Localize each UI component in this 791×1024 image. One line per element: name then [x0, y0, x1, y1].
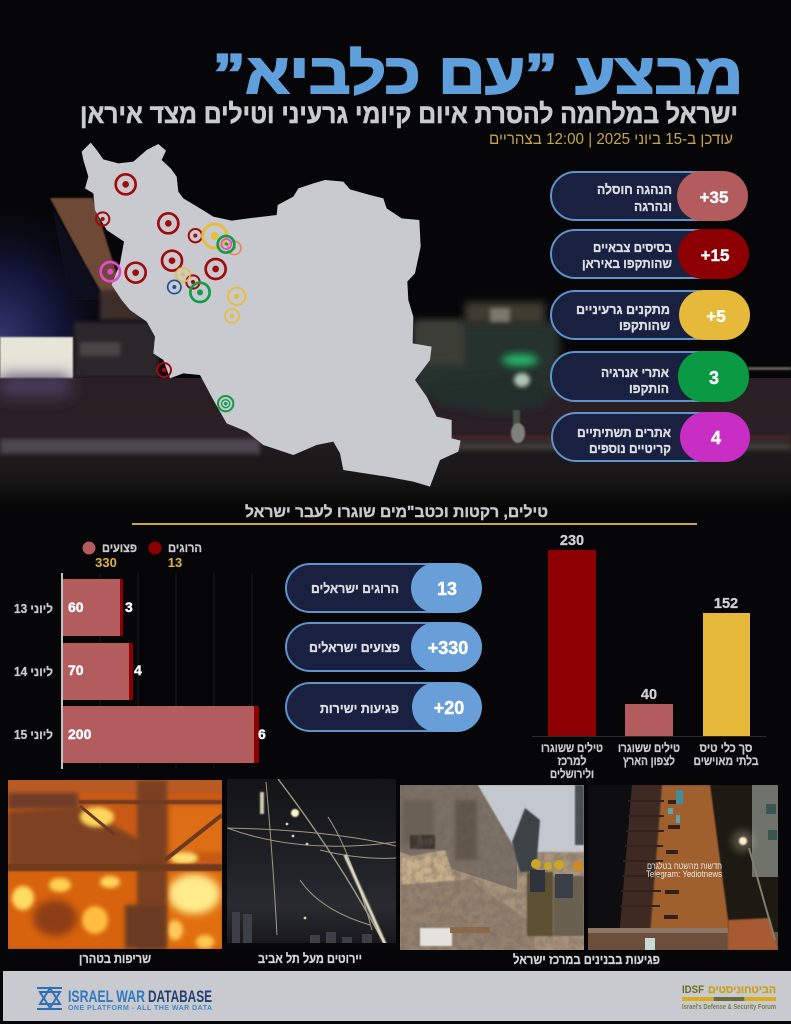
- logo: Israel War Database: ONE PLATFORM - ALL THE WAR DATA: [68, 1005, 212, 1012]
- stat pill: critical infrastructure: אתרים תשתיתיים: [577, 425, 671, 440]
- bar: total UAVs: בלתי מאוישים: [694, 754, 758, 768]
- background photo: fighter jets on a runway: [0, 198, 791, 508]
- photo: rubble and rescue workers: [400, 785, 584, 950]
- logo: IDSF: הביטחוניסטים: [708, 984, 776, 996]
- bar: launched at the north: לצפון הארץ: [623, 754, 675, 768]
- photo: damaged high-rise with news watermark: [588, 785, 778, 950]
- stat pill: leadership eliminated: [551, 171, 748, 221]
- bar: June 13: 3: [125, 599, 133, 615]
- photo: damaged high-rise with news watermark: חדשות מהשטח בטלגרם: [647, 861, 722, 871]
- photo: fire in Tehran: [8, 780, 222, 949]
- stat pill: military bases: בסיסים צבאיים: [593, 240, 672, 255]
- bar: launched at centre and Jerusalem: למרכז: [558, 754, 586, 768]
- stat pill: direct hits: +20: [434, 698, 464, 718]
- map of Iran with strike targets: [82, 143, 461, 487]
- stat pill: nuclear facilities: [551, 290, 750, 340]
- bar: total UAVs: סך כלי טיס: [700, 741, 753, 755]
- bar: June 14: [14, 643, 142, 700]
- logo: Israel War Database: ISRAEL WAR: [68, 987, 145, 1006]
- stat pill: critical infrastructure: [552, 412, 750, 462]
- bar: June 15: [14, 706, 266, 763]
- launches vertical bar chart: [532, 533, 766, 781]
- subtitle: ישראל במלחמה להסרת איום קיומי גרעיני וטילים מצד איראן: [80, 99, 738, 129]
- stat pill: Israeli wounded: פצועים ישראלים: [309, 640, 400, 655]
- bar: June 14: 4: [134, 662, 142, 678]
- bar: total UAVs: 152: [714, 596, 738, 612]
- casualties bar chart legend: פצועים: [102, 541, 137, 555]
- section heading: טילים, רקטות וכטב"מים שוגרו לעבר ישראל: [245, 504, 548, 521]
- bar: June 13: [14, 579, 133, 636]
- photo: damaged high-rise with news watermark: Telegram: Yediotnews: [646, 869, 722, 879]
- stat pill: military bases: +15: [701, 246, 729, 265]
- bar: total UAVs: [694, 596, 758, 768]
- casualties horizontal bar chart: [14, 573, 266, 769]
- bar: launched at centre and Jerusalem: 230: [560, 533, 584, 549]
- stat pill: leadership eliminated: +35: [700, 188, 728, 207]
- footer band: [3, 971, 791, 1021]
- title: מבצע ”עם כלביא”: [213, 42, 743, 105]
- stat pill: Israeli dead: 13: [437, 579, 457, 599]
- update date: עודכן ב-15 ביוני 2025 | 12:00 בצהריים: [489, 131, 733, 148]
- casualties bar chart legend: 13: [168, 555, 182, 570]
- bar: launched at centre and Jerusalem: [541, 533, 603, 781]
- bar: June 13: 60: [68, 599, 84, 615]
- stat pill: leadership eliminated: ונהרגה: [634, 199, 672, 214]
- logo: Israel War Database: DATABASE: [148, 987, 212, 1006]
- bar: June 15: 6: [258, 726, 266, 742]
- stat pill: military bases: [551, 229, 749, 279]
- bar: June 14: 70: [68, 662, 84, 678]
- stat pill: Israeli dead: [286, 563, 482, 613]
- stat pill: energy sites: 3: [709, 368, 719, 388]
- logo: IDSF: [682, 984, 776, 1011]
- bar: launched at the north: [618, 687, 680, 768]
- stat pill: leadership eliminated: הנהגה חוסלה: [597, 182, 672, 197]
- bar: launched at centre and Jerusalem: טילים ששוגרו: [541, 741, 603, 755]
- stat pill: energy sites: הותקפו: [629, 381, 669, 396]
- stat pill: nuclear facilities: +5: [706, 307, 726, 326]
- casualties bar chart legend: הרוגים: [168, 541, 202, 555]
- bar: June 13: ליוני 13: [14, 602, 53, 616]
- stat pill: Israeli dead: הרוגים ישראלים: [311, 581, 399, 596]
- bar: launched at the north: 40: [641, 687, 657, 703]
- casualties bar chart legend: [82, 541, 202, 570]
- casualties bar chart legend: 330: [95, 555, 117, 570]
- target markers: [96, 174, 226, 377]
- stat pill: critical infrastructure: 4: [711, 428, 721, 448]
- bar: launched at the north: טילים ששוגרו: [618, 741, 680, 755]
- icon: star of David emblem: [37, 988, 62, 1009]
- stat pill: military bases: שהותקפו באיראן: [582, 256, 672, 271]
- caption: fires in Tehran: שריפות בטהרן: [79, 951, 151, 966]
- stat pill: Israeli wounded: +330: [428, 638, 468, 658]
- stat pill: critical infrastructure: קריטיים נוספים: [589, 441, 671, 456]
- stat pill: direct hits: פגיעות ישירות: [320, 701, 399, 716]
- photo: interceptions over Tel Aviv: [227, 779, 396, 949]
- caption: interceptions over Tel Aviv: יירוטים מעל תל אביב: [258, 951, 362, 966]
- stat pill: Israeli wounded: [286, 622, 482, 672]
- bar: June 14: ליוני 14: [14, 665, 53, 679]
- bar: launched at centre and Jerusalem: ולירושלים: [550, 767, 594, 781]
- logo: IDSF: IDSF: [682, 984, 704, 996]
- stat pill: energy sites: אתרי אנרגיה: [601, 365, 669, 380]
- bar: June 15: 200: [68, 726, 92, 742]
- stat pill: nuclear facilities: מתקנים גרעיניים: [576, 302, 670, 317]
- map outline: [82, 143, 461, 487]
- bar: June 15: ליוני 15: [14, 728, 53, 742]
- caption: hits in central Israel: פגיעות בבנינים במרכז ישראל: [513, 952, 660, 967]
- stat pill: direct hits: [286, 682, 482, 732]
- stat pill: nuclear facilities: שהותקפו: [619, 318, 670, 333]
- stat pill: energy sites: [551, 351, 749, 402]
- logo: Israel War Database: [37, 987, 212, 1012]
